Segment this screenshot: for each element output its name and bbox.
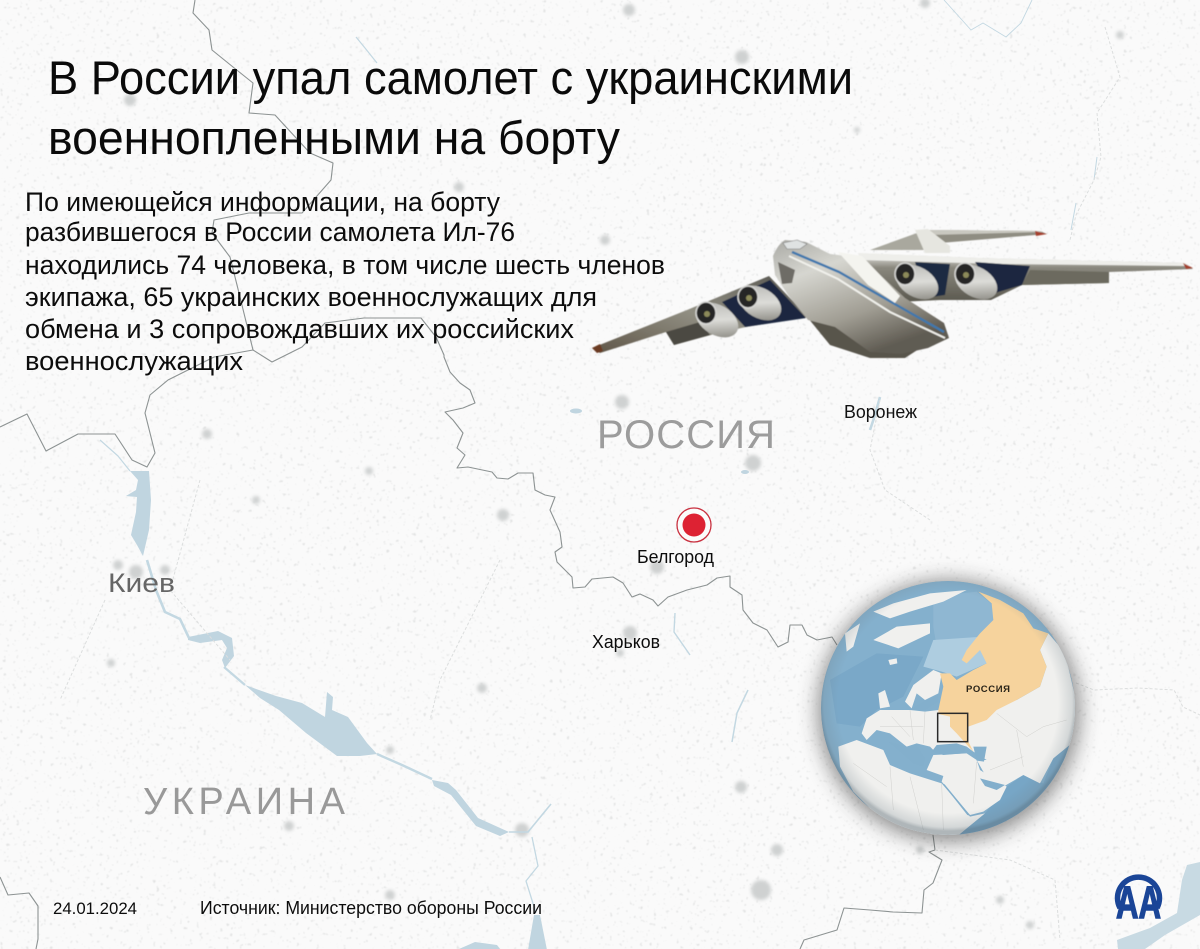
country borders <box>0 0 942 949</box>
plane: tail <box>870 229 1047 253</box>
crash site marker <box>677 508 711 542</box>
globe: locator box <box>938 713 968 742</box>
globe: inner seas <box>906 743 1005 816</box>
title: военнопленными на борту <box>48 111 620 164</box>
body text: экипажа, 65 украинских военнослужащих для <box>25 282 597 312</box>
city label: Kyiv: Киев <box>108 568 175 598</box>
locator globe <box>818 580 1080 842</box>
logo: Anadolu Agency <box>1116 877 1161 928</box>
globe: Russia label: РОССИЯ <box>966 684 1010 695</box>
logo: Anadolu Agency: AA <box>1116 877 1161 928</box>
body text: По имеющейся информации, на борту <box>25 187 500 217</box>
body text: обмена и 3 сопровождавших их российских <box>25 314 574 344</box>
body text: находились 74 человека, в том числе шесть членов <box>25 250 665 280</box>
city label: Belgorod: Белгород <box>637 547 714 567</box>
body text <box>25 187 665 376</box>
globe: borders <box>853 710 1067 830</box>
city label: Kharkiv: Харьков <box>592 632 660 652</box>
plane illustration <box>592 229 1193 358</box>
source: Источник: Министерство обороны России <box>200 898 542 918</box>
body text: разбившегося в России самолета Ил-76 <box>25 217 515 247</box>
plane: fuselage <box>773 240 949 358</box>
title: В России упал самолет с украинскими <box>48 51 853 104</box>
globe: Russia <box>938 592 1048 752</box>
plane: right wing <box>858 253 1193 302</box>
country label: Ukraine: УКРАИНА <box>143 781 346 823</box>
date: 24.01.2024 <box>53 900 137 918</box>
globe: land <box>838 590 1077 840</box>
rivers and reservoirs <box>126 408 1200 949</box>
body text: военнослужащих <box>25 346 244 376</box>
plane: left wing <box>592 276 808 353</box>
city label: Voronezh: Воронеж <box>844 402 917 422</box>
title <box>48 51 853 164</box>
globe: seas <box>830 592 1073 835</box>
plane: engines <box>690 258 1003 344</box>
country label: Russia: РОССИЯ <box>597 413 775 457</box>
